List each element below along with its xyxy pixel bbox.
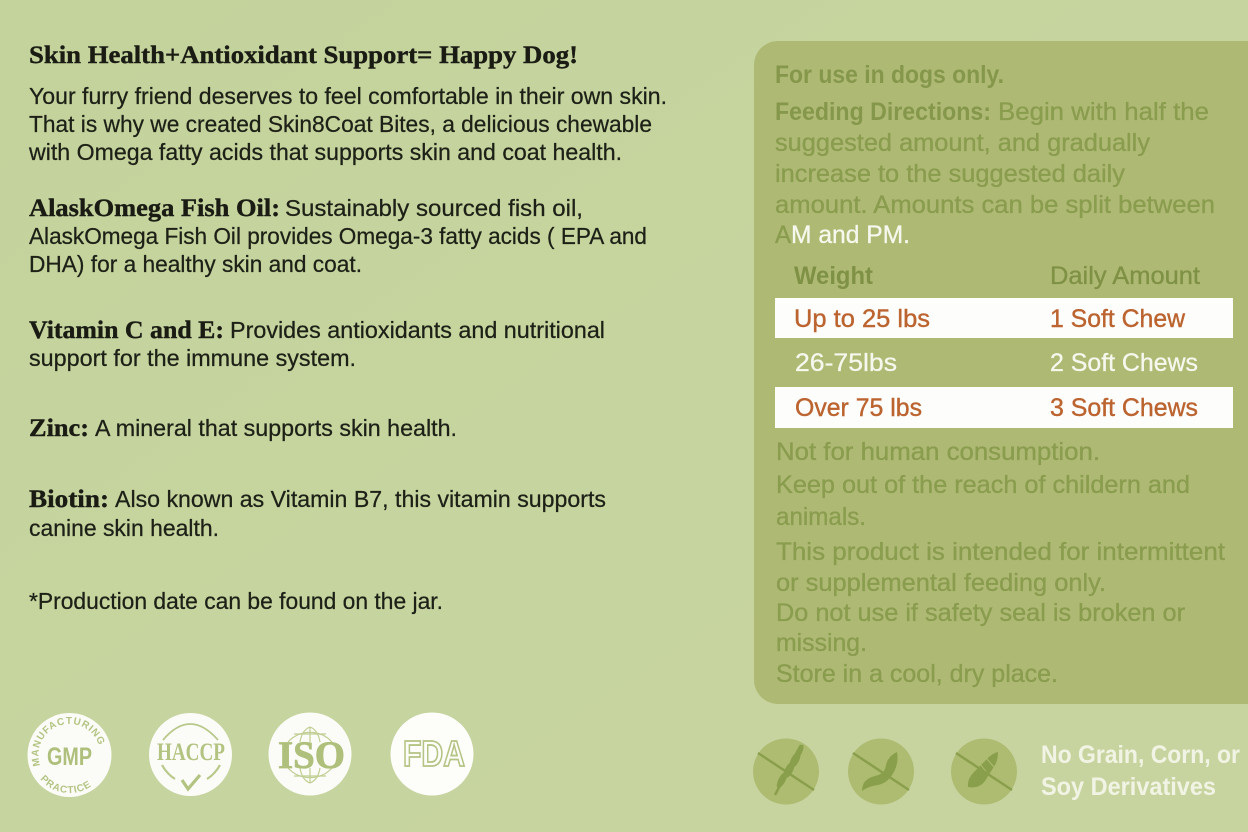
feeding directions text: suggested amount, and gradually bbox=[775, 129, 1151, 157]
warnings text: Do not use if safety seal is broken or bbox=[776, 599, 1185, 627]
ingredient: AlaskOmega Fish Oil bbox=[29, 195, 647, 277]
icon: GMP badge: PRACTICE bbox=[40, 774, 91, 793]
warnings text: animals. bbox=[776, 503, 866, 531]
ingredient: Vitamin C and E: support for the immune system. bbox=[29, 345, 356, 371]
icon: no corn bbox=[951, 738, 1017, 804]
warnings text: This product is intended for intermittent bbox=[776, 538, 1225, 566]
ingredient: Zinc: Zinc: bbox=[29, 415, 89, 442]
intro text block bbox=[28, 83, 667, 165]
intro text block: That is why we created Skin8Coat Bites, a delicious chewable bbox=[29, 111, 652, 137]
intro text block: Your furry friend deserves to feel comfortable in their own skin. bbox=[29, 83, 667, 109]
dosage table: Up to 25 lbs bbox=[794, 305, 930, 333]
dosage table: 26-75lbs bbox=[795, 349, 897, 377]
icon: HACCP badge: HACCP bbox=[157, 739, 225, 766]
warnings text: Store in a cool, dry place. bbox=[776, 660, 1058, 688]
ingredient: AlaskOmega Fish Oil: DHA) for a healthy skin and coat. bbox=[29, 251, 362, 277]
icon: ISO badge bbox=[268, 712, 352, 796]
icon: no soy bbox=[848, 738, 914, 804]
feeding directions text: increase to the suggested daily bbox=[775, 160, 1126, 188]
ingredient: AlaskOmega Fish Oil: Sustainably sourced fish oil, bbox=[285, 195, 583, 221]
ingredient: AlaskOmega Fish Oil: AlaskOmega Fish Oil provides Omega-3 fatty acids ( EPA and bbox=[29, 223, 647, 249]
icon: ISO badge: ISO bbox=[278, 734, 345, 777]
feeding directions text: Feeding Directions: bbox=[775, 98, 991, 126]
dosage table bbox=[775, 262, 1233, 428]
no grain caption bbox=[1041, 741, 1240, 801]
warnings text: or supplemental feeding only. bbox=[776, 569, 1106, 597]
feeding directions text: amount. Amounts can be split between bbox=[775, 191, 1215, 219]
ingredient: AlaskOmega Fish Oil: AlaskOmega Fish Oil: bbox=[29, 195, 280, 222]
title: Skin Health+Antioxidant Support= Happy Dog! bbox=[29, 42, 578, 69]
warnings text: Not for human consumption. bbox=[776, 438, 1100, 466]
dosage table: 1 Soft Chew bbox=[1050, 305, 1186, 333]
feeding directions text bbox=[775, 98, 1215, 249]
feeding directions text: A bbox=[775, 221, 791, 249]
ingredient: Vitamin C and E: Vitamin C and E: bbox=[29, 317, 224, 344]
icon: FDA badge: FDA bbox=[403, 733, 465, 774]
dosage table: Weight bbox=[794, 262, 874, 290]
ingredient: Biotin bbox=[29, 486, 606, 541]
ingredient: Vitamin C and E bbox=[29, 317, 605, 371]
feeding directions text: Begin with half the bbox=[998, 98, 1209, 126]
dosage table: 3 Soft Chews bbox=[1050, 394, 1198, 422]
ingredient: Zinc: A mineral that supports skin health. bbox=[95, 415, 457, 441]
ingredient: Biotin: Also known as Vitamin B7, this vitamin supports bbox=[115, 486, 606, 512]
panel: feeding directions bbox=[754, 41, 1248, 704]
ingredient: Vitamin C and E: Provides antioxidants and nutritional bbox=[230, 317, 605, 343]
intro text block: with Omega fatty acids that supports skin and coat health. bbox=[28, 139, 622, 165]
dosage table: 2 Soft Chews bbox=[1050, 349, 1198, 377]
dosage table: Daily Amount bbox=[1050, 262, 1200, 290]
icon: GMP badge: GMP bbox=[47, 743, 92, 771]
dosage table: Over 75 lbs bbox=[795, 394, 922, 422]
icon: GMP badge bbox=[28, 713, 112, 797]
use notice: For use in dogs only. bbox=[775, 61, 1004, 89]
feeding directions text: M and PM. bbox=[791, 221, 910, 249]
ingredient: Biotin: Biotin: bbox=[29, 486, 109, 513]
production date note: *Production date can be found on the jar. bbox=[29, 588, 443, 614]
warnings text bbox=[776, 438, 1225, 688]
no grain caption: Soy Derivatives bbox=[1041, 773, 1216, 801]
warnings text: Keep out of the reach of childern and bbox=[776, 471, 1190, 499]
icon: FDA badge bbox=[390, 712, 474, 796]
icon: no grain bbox=[753, 738, 819, 804]
ingredient: Biotin: canine skin health. bbox=[29, 515, 219, 541]
icon: HACCP badge bbox=[149, 713, 232, 796]
icon: GMP badge: MANUFACTURING bbox=[32, 717, 104, 766]
warnings text: missing. bbox=[776, 629, 867, 657]
